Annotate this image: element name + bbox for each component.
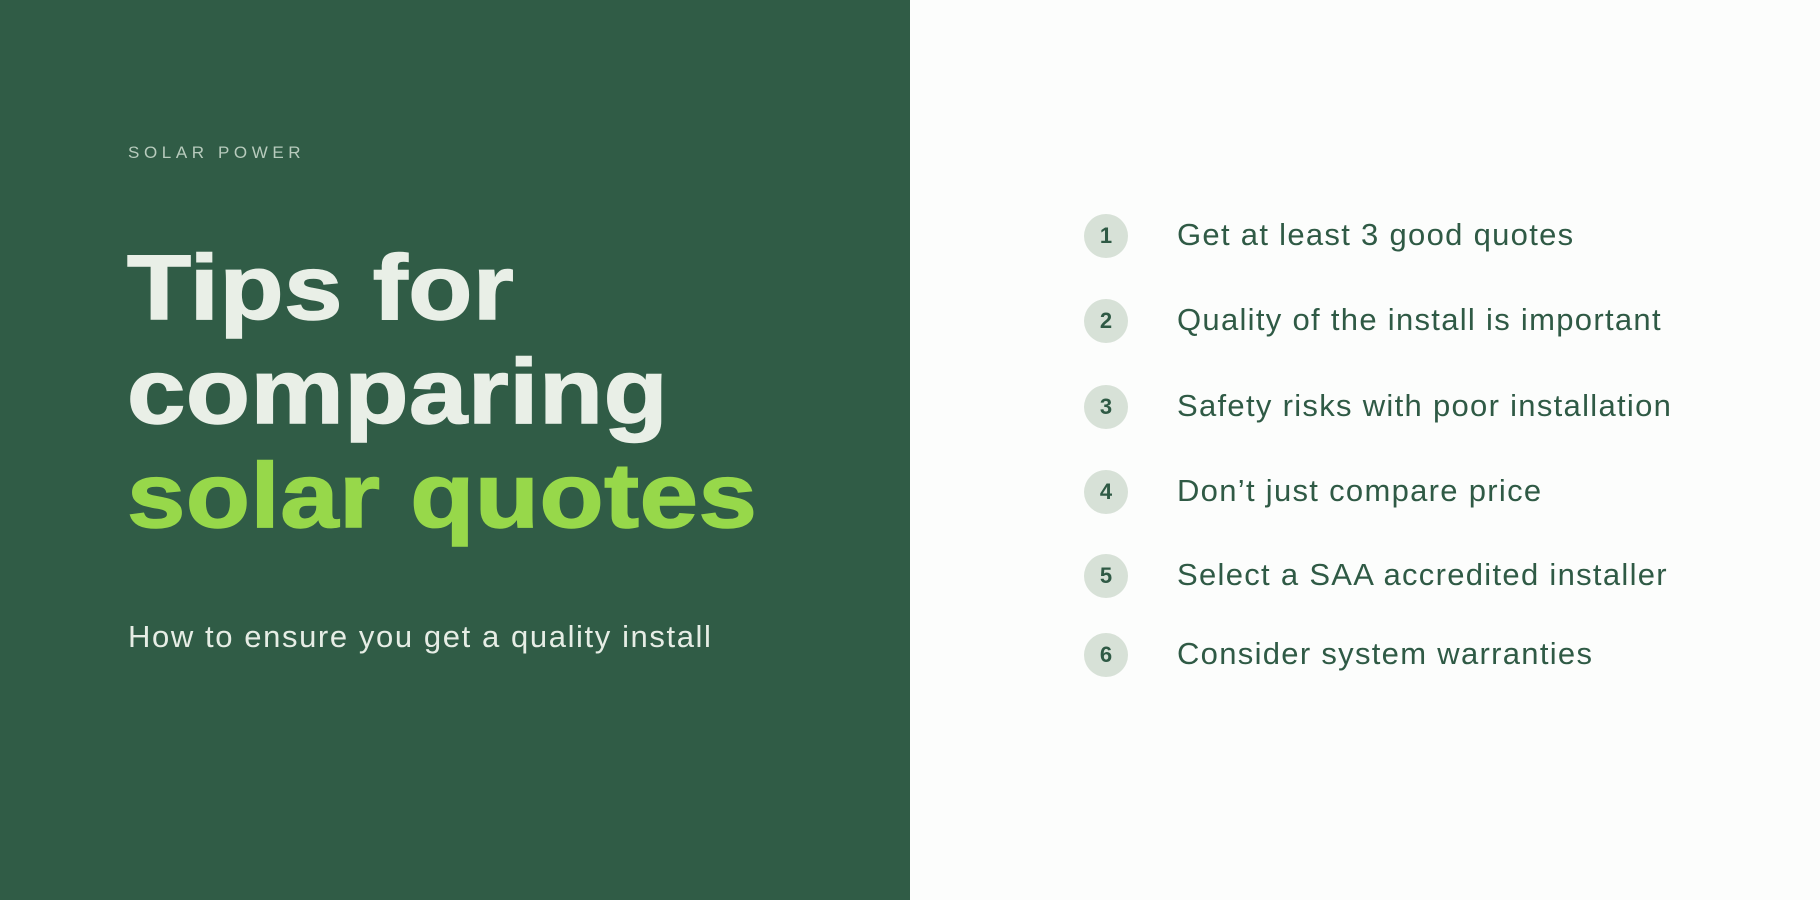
tip 4: 4 (1100, 479, 1112, 504)
tip 3: Safety risks with poor installation (1177, 388, 1672, 423)
tip 1: 1 (1100, 223, 1112, 248)
tip 4: Don’t just compare price (1177, 473, 1542, 508)
tip 2 (1084, 299, 1662, 343)
tip 2: Quality of the install is important (1177, 302, 1662, 337)
title (127, 237, 757, 547)
tip 5: 5 (1100, 563, 1112, 588)
tip 3: 3 (1100, 394, 1112, 419)
tip 6: Consider system warranties (1177, 636, 1593, 671)
title: comparing (127, 341, 668, 443)
kicker: solar power: SOLAR POWER (128, 143, 305, 162)
tip 5: Select a SAA accredited installer (1177, 557, 1668, 592)
tip 4 (1084, 470, 1542, 514)
panel: left green (0, 0, 910, 900)
title: Tips for (127, 237, 514, 339)
tip 2: 2 (1100, 308, 1112, 333)
tip 3 (1084, 385, 1672, 429)
tip 1: Get at least 3 good quotes (1177, 217, 1574, 252)
tip 1 (1084, 214, 1574, 258)
subtitle: How to ensure you get a quality install (128, 619, 713, 654)
tip 6 (1084, 633, 1593, 677)
panel: tips list (1084, 214, 1672, 677)
tip 5 (1084, 554, 1668, 598)
title: solar quotes (127, 445, 757, 547)
tip 6: 6 (1100, 642, 1112, 667)
